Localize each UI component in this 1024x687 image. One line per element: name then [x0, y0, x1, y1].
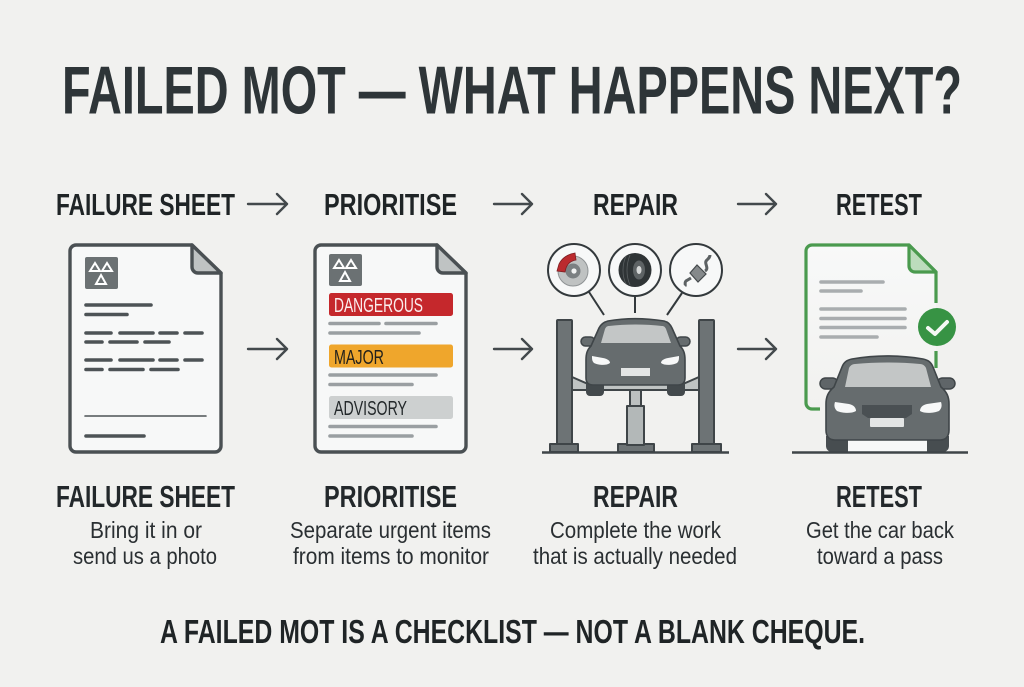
ground line [792, 451, 968, 454]
arrow: row three to four [738, 339, 776, 359]
panel: failure sheet document [70, 245, 221, 452]
caption: repair: Complete the work [550, 517, 721, 543]
text lines [821, 282, 905, 337]
icon: triangle logo [329, 254, 362, 286]
icon: triangle logo [85, 257, 118, 289]
caption: failure sheet [56, 479, 235, 569]
panel: retest illustration [792, 245, 968, 452]
label: advisory: ADVISORY [334, 398, 407, 420]
arrow: heading three to four [738, 194, 776, 214]
lift [542, 320, 729, 452]
arrow: heading two to three [494, 194, 532, 214]
arrow: row two to three [494, 339, 532, 359]
caption: repair: that is actually needed [533, 543, 737, 569]
caption: repair: REPAIR [593, 479, 678, 514]
caption: prioritise: Separate urgent items [290, 517, 491, 543]
panel: repair illustration [542, 244, 729, 452]
icon: car on lift [581, 319, 690, 396]
text lines [330, 324, 436, 436]
heading: prioritise: PRIORITISE [324, 187, 457, 222]
text lines [85, 305, 206, 436]
caption: retest [806, 479, 954, 569]
caption: failure sheet: Bring it in or [90, 517, 202, 543]
caption: retest: toward a pass [817, 543, 943, 569]
document with green outline [806, 245, 936, 409]
label: major: MAJOR [334, 347, 384, 369]
caption: prioritise: PRIORITISE [324, 479, 457, 514]
heading: repair: REPAIR [593, 187, 678, 222]
arrow: row one to two [248, 339, 287, 359]
step headings row [56, 187, 922, 222]
caption: prioritise: from items to monitor [293, 543, 489, 569]
icon: tyre [609, 244, 661, 296]
heading: retest: RETEST [836, 187, 922, 222]
label: dangerous: DANGEROUS [334, 295, 423, 317]
icon: brake disc [548, 244, 600, 296]
icon: exhaust [670, 244, 722, 296]
caption: retest: RETEST [836, 479, 922, 514]
panel: prioritise document [315, 245, 466, 452]
caption: retest: Get the car back [806, 517, 954, 543]
arrow: heading one to two [248, 194, 287, 214]
caption: repair [533, 479, 737, 569]
heading: failure sheet: FAILURE SHEET [56, 187, 235, 222]
connector lines [589, 292, 682, 315]
caption: failure sheet: send us a photo [73, 543, 217, 569]
caption: failure sheet: FAILURE SHEET [56, 479, 235, 514]
caption: prioritise [290, 479, 491, 569]
label: major [329, 344, 453, 369]
icon: green check [918, 308, 956, 346]
icon: car [820, 356, 955, 452]
